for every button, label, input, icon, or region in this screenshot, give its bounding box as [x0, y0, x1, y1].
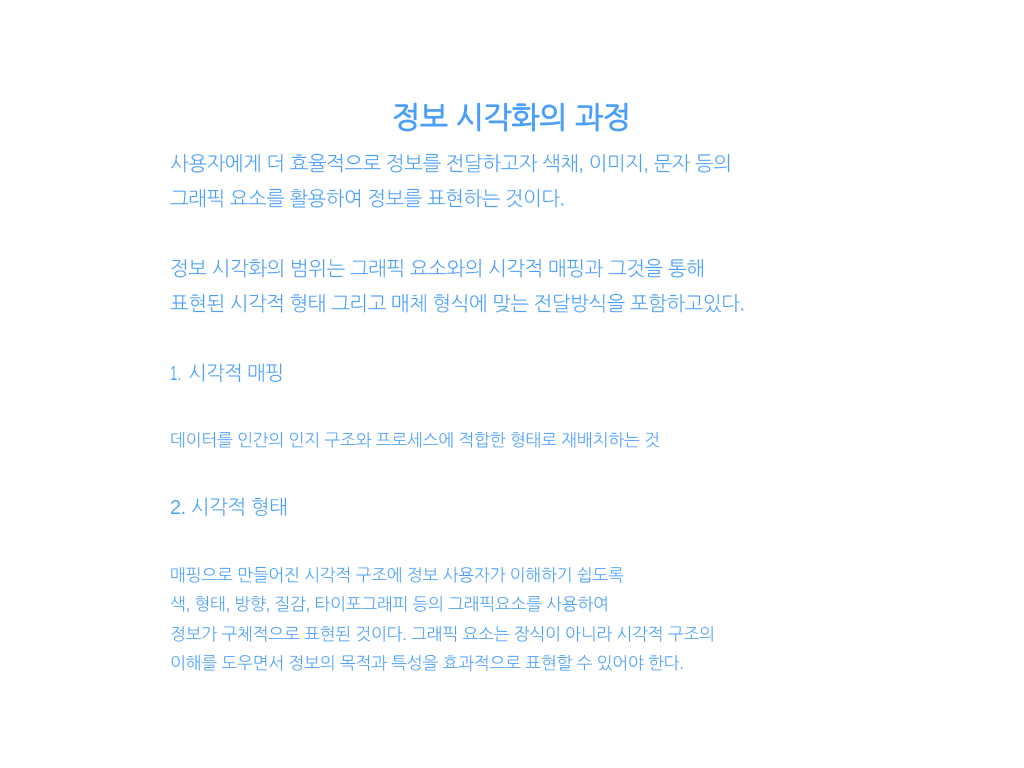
text block: visual form description: 매핑으로 만들어진 시각적 구조에 정보 사용자가 이해하기 쉽도록	[170, 566, 624, 585]
text block: visual form description: 정보가 구체적으로 표현된 것이다. 그래픽 요소는 장식이 아니라 시각적 구조의	[170, 625, 715, 644]
text block: definition: 사용자에게 더 효율적으로 정보를 전달하고자 색채, 이미지, 문자 등의	[170, 154, 732, 176]
text block: definition	[170, 154, 732, 210]
text block: visual form description	[170, 566, 715, 673]
heading: visual form: 2. 시각적 형태	[170, 497, 288, 519]
text block: scope: 정보 시각화의 범위는 그래픽 요소와의 시각적 매핑과 그것을 통해	[170, 258, 705, 280]
title: 정보 시각화의 과정	[392, 102, 631, 135]
text block: visual form description: 색, 형태, 방향, 질감, 타이포그래피 등의 그래픽요소를 사용하여	[170, 595, 609, 614]
heading: visual mapping: 시각적 매핑	[188, 363, 284, 385]
text block: visual mapping description: 데이터를 인간의 인지 구조와 프로세스에 적합한 형태로 재배치하는 것	[170, 431, 660, 450]
text block: scope: 표현된 시각적 형태 그리고 매체 형식에 맞는 전달방식을 포함하고있다.	[170, 294, 745, 316]
text block: visual form description: 이해를 도우면서 정보의 목적과 특성을 효과적으로 표현할 수 있어야 한다.	[170, 654, 684, 673]
text block: scope	[170, 258, 745, 316]
heading: visual mapping: 1.	[170, 363, 181, 385]
text block: definition: 그래픽 요소를 활용하여 정보를 표현하는 것이다.	[170, 188, 565, 210]
